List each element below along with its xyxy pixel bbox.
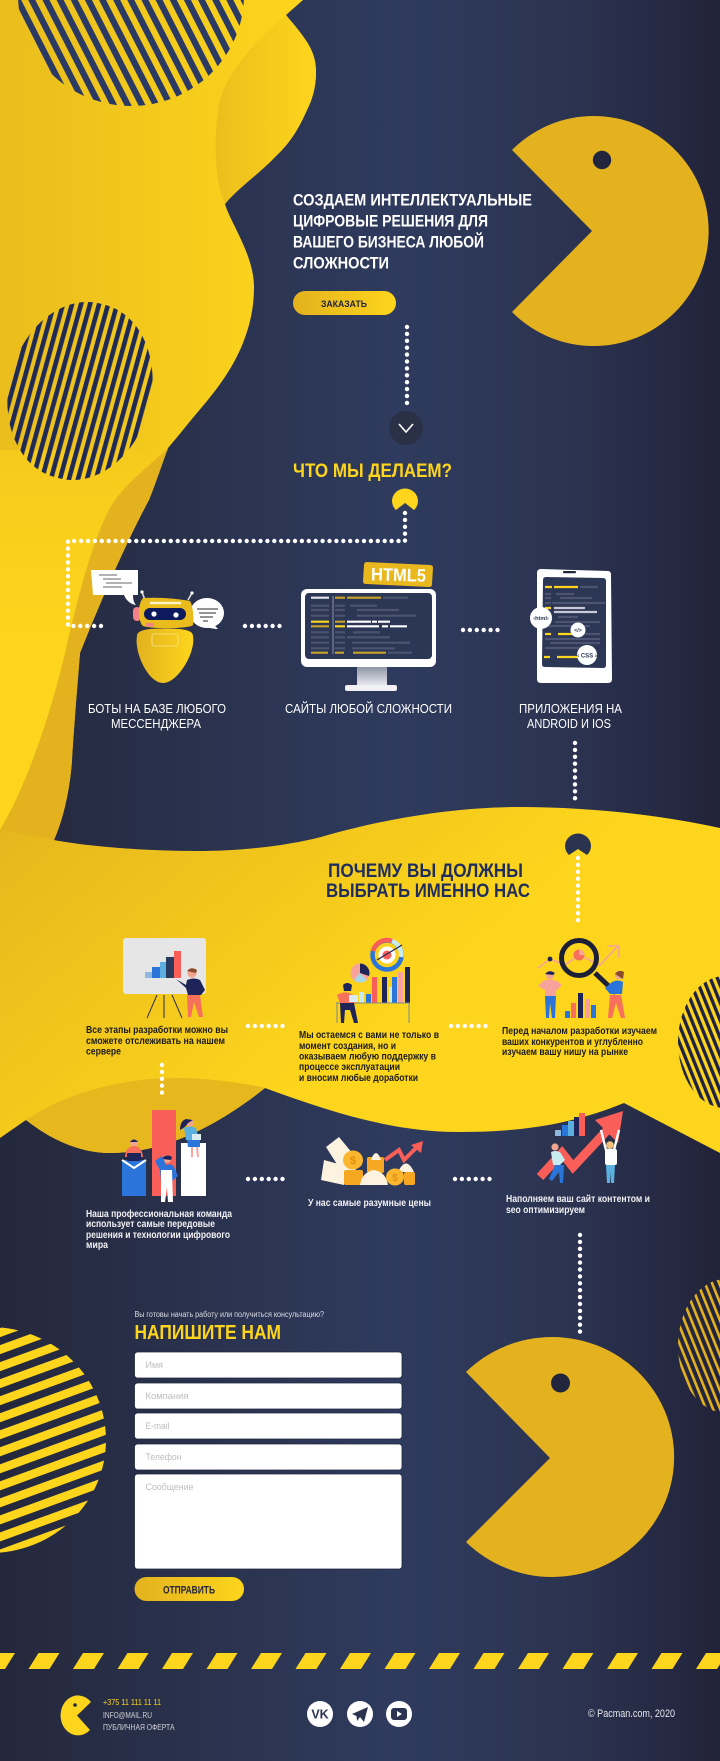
text: support: оказываем любую поддержку в	[299, 1051, 436, 1063]
heading why us	[326, 861, 530, 902]
service labels: БОТЫ НА БАЗЕ ЛЮБОГО	[88, 701, 226, 716]
icon: youtube	[386, 1701, 412, 1727]
striped ellipse section right	[678, 976, 720, 1108]
dots monitor to phone	[463, 628, 499, 632]
service labels: ANDROID И IOS	[527, 716, 611, 731]
illustration: team on bars	[122, 1110, 206, 1202]
contact heading	[134, 1310, 324, 1344]
field: message	[134, 1474, 402, 1569]
text: team: решения и технологии цифрового	[86, 1229, 230, 1241]
illustration: presentation board	[123, 938, 206, 1018]
text: content seo: Наполняем ваш сайт контентом и	[506, 1193, 650, 1205]
field: company: Компания	[146, 1391, 188, 1402]
icon: robot	[91, 570, 224, 683]
text: team: использует самые передовые	[86, 1218, 215, 1230]
dotted connector services	[68, 513, 405, 626]
hero yellow blob	[0, 0, 316, 840]
panel: why us yellow wave	[0, 807, 720, 1153]
text: stages	[86, 1024, 228, 1058]
text: content seo	[506, 1193, 650, 1216]
contact heading: Вы готовы начать работу или получиться консультацию?	[134, 1310, 324, 1319]
icon: monitor	[301, 589, 436, 691]
text: support: процессе эксплуатации	[299, 1061, 400, 1073]
icon: phone: ‹ CSS ›	[577, 654, 597, 660]
text: research: изучаем вашу нишу на рынке	[502, 1046, 628, 1058]
field: phone: Телефон	[146, 1452, 182, 1463]
text: team: мира	[86, 1239, 108, 1251]
service labels: САЙТЫ ЛЮБОЙ СЛОЖНОСТИ	[285, 701, 452, 716]
order button	[293, 291, 396, 315]
small yellow pacman	[392, 488, 418, 510]
order button: ЗАКАЗАТЬ	[321, 299, 367, 310]
text: research: ваших конкурентов и углубленно	[502, 1036, 643, 1048]
striped circle top	[18, 0, 244, 106]
hero title: СЛОЖНОСТИ	[293, 254, 389, 272]
field: message: Сообщение	[146, 1482, 194, 1493]
pacman contact	[466, 1337, 674, 1577]
text: research: Перед началом разработки изучаем	[502, 1025, 657, 1037]
dots from dark pacman	[576, 858, 580, 923]
field: phone	[134, 1444, 402, 1470]
text: content seo: seo оптимизируем	[506, 1204, 585, 1216]
icon: phone: </>	[574, 628, 582, 634]
hero title: ЦИФРОВЫЕ РЕШЕНИЯ ДЛЯ	[293, 212, 488, 230]
text: stages: сервере	[86, 1046, 121, 1058]
text: support	[299, 1029, 439, 1084]
darker hump	[26, 1078, 265, 1153]
field: name	[134, 1352, 402, 1378]
badge HTML5: HTML5	[371, 564, 426, 586]
striped ellipse left	[7, 302, 153, 480]
dots to big pacman	[578, 1235, 582, 1332]
footer contacts	[103, 1697, 175, 1732]
text: support: момент создания, но и	[299, 1040, 396, 1052]
illustration: magnifier research	[538, 940, 625, 1018]
text: prices: У нас самые разумные цены	[308, 1197, 431, 1209]
illustration: analytics desk	[336, 940, 410, 1023]
dots 4	[455, 1177, 493, 1181]
dotted connector hero	[405, 327, 409, 403]
illustration: money: $	[350, 1155, 356, 1167]
copyright: © Pacman.com, 2020	[588, 1708, 675, 1720]
text: support: Мы остаемся с вами не только в	[299, 1029, 439, 1041]
heading what we do: ЧТО МЫ ДЕЛАЕМ?	[293, 461, 452, 482]
illustration: growth arrow	[540, 1111, 623, 1183]
footer contacts: +375 11 111 11 11	[103, 1697, 161, 1707]
hero title: СОЗДАЕМ ИНТЕЛЛЕКТУАЛЬНЫЕ	[293, 190, 532, 210]
heading why us: ПОЧЕМУ ВЫ ДОЛЖНЫ	[328, 861, 523, 882]
text: research	[502, 1025, 657, 1058]
hero title	[293, 190, 532, 272]
submit button: ОТПРАВИТЬ	[163, 1584, 215, 1596]
pacman hero	[512, 116, 709, 346]
contact heading: НАПИШИТЕ НАМ	[134, 1322, 281, 1344]
striped circle contact left	[0, 1327, 106, 1553]
illustration: money: $	[392, 1173, 398, 1184]
footer contacts: ПУБЛИЧНАЯ ОФЕРТА	[103, 1722, 175, 1732]
hero title: ВАШЕГО БИЗНЕСА ЛЮБОЙ	[293, 232, 484, 252]
dots 1	[248, 1024, 286, 1028]
field: email: E-mail	[146, 1421, 170, 1432]
field: company	[134, 1383, 402, 1409]
icon: vk: VK	[311, 1708, 329, 1722]
text: stages: Все этапы разработки можно вы	[86, 1024, 228, 1036]
hazard stripe band	[0, 1653, 720, 1669]
icon: telegram	[347, 1701, 373, 1727]
dots robot to monitor	[245, 624, 280, 628]
service labels: ПРИЛОЖЕНИЯ НА	[519, 701, 622, 716]
dots 2	[451, 1024, 489, 1028]
small dark pacman	[565, 833, 591, 855]
dots 3	[248, 1177, 286, 1181]
submit button	[134, 1577, 244, 1601]
field: name: Имя	[146, 1360, 163, 1371]
service labels	[88, 701, 622, 731]
text: team: Наша профессиональная команда	[86, 1208, 232, 1220]
field: email	[134, 1413, 402, 1439]
contact form	[134, 1352, 402, 1569]
text: stages: сможете отслеживать на нашем	[86, 1035, 225, 1047]
dots team vertical	[160, 1065, 164, 1099]
icon: phone: ‹html›	[533, 616, 549, 622]
heading why us: ВЫБРАТЬ ИМЕННО НАС	[326, 881, 530, 902]
service labels: МЕССЕНДЖЕРА	[111, 716, 201, 731]
icon: vk	[307, 1701, 333, 1727]
text: team	[86, 1208, 232, 1251]
illustration: money	[321, 1137, 423, 1186]
text: support: и вносим любые доработки	[299, 1072, 418, 1084]
striped ellipse contact right	[678, 1279, 720, 1413]
dots down to section	[573, 743, 577, 804]
scroll chevron	[389, 411, 423, 445]
footer contacts: INFO@MAIL.RU	[103, 1710, 152, 1720]
icon: phone	[530, 569, 612, 683]
footer logo pacman	[61, 1695, 91, 1735]
